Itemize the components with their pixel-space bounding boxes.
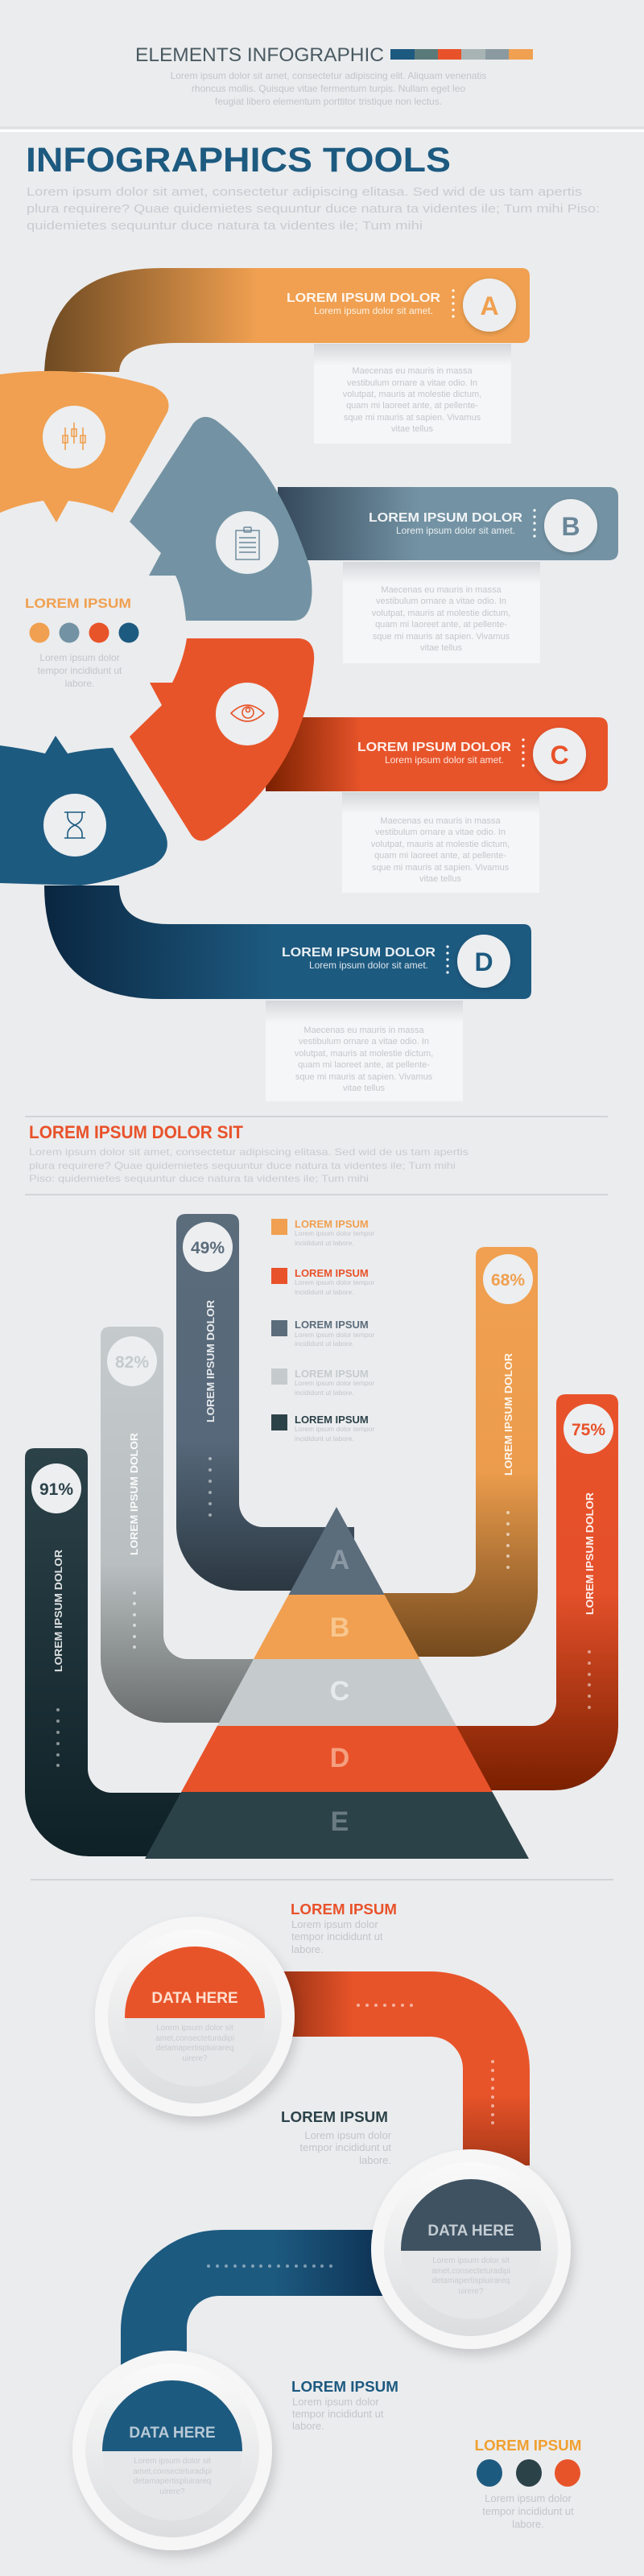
- header subtitle: rhoncus mollis. Quisque vitae fermentum turpis. Nullam eget leo: [192, 83, 465, 94]
- circle 2: data here slate: DATA HERE: [427, 2223, 514, 2240]
- text box D: sque mi mauris at sapien. Vivamus: [295, 1072, 433, 1082]
- bar 49%: [176, 1214, 354, 1591]
- circle 2: data here slate: detamapertispluirareq: [432, 2277, 510, 2285]
- legend: Lorem ipsum dolor tempor: [295, 1331, 374, 1339]
- circle 1: data here orange: Lorem ipsum dolor sit: [156, 2024, 233, 2033]
- banner D: [44, 886, 531, 999]
- banner A: A: [480, 291, 499, 320]
- text box B: Maecenas eu mauris in massa: [381, 585, 502, 595]
- center legend: [25, 596, 138, 689]
- bar 82%: 82%: [115, 1353, 149, 1372]
- text box B: volutpat, mauris at molestie dictum,: [372, 609, 510, 618]
- bar 75%: 75%: [572, 1421, 605, 1439]
- bar 91%: LOREM IPSUM DOLOR: [52, 1549, 64, 1672]
- text box A: vitae tellus: [391, 424, 433, 434]
- text box D: vitae tellus: [343, 1084, 385, 1093]
- banner A: Lorem ipsum dolor sit amet.: [314, 305, 433, 316]
- banner D: Lorem ipsum dolor sit amet.: [309, 960, 428, 971]
- legend: Lorem ipsum dolor tempor: [295, 1425, 374, 1433]
- segment: orange: [0, 371, 169, 522]
- text box C: volutpat, mauris at molestie dictum,: [371, 840, 510, 849]
- callout: dark lorem ipsum: LOREM IPSUM: [281, 2109, 388, 2125]
- pyramid: E: [331, 1806, 349, 1837]
- circle 1: data here orange: [95, 1917, 295, 2116]
- center legend: Lorem ipsum dolor: [39, 652, 120, 663]
- circle 3: data here blue: DATA HERE: [129, 2425, 216, 2442]
- header subtitle: Lorem ipsum dolor sit amet, consectetur adipiscing elit. Aliquam venenatis: [171, 70, 486, 81]
- legend: bottom right: labore.: [512, 2518, 544, 2530]
- icon: sliders: [63, 423, 85, 450]
- circle 3: data here blue: amet,consecteturadipi: [133, 2467, 212, 2476]
- pyramid: C: [330, 1676, 349, 1707]
- banner C: LOREM IPSUM DOLOR: [357, 741, 511, 754]
- legend: incididunt ut labore.: [295, 1288, 354, 1296]
- pyramid: [145, 1507, 529, 1859]
- header subtitle: feugiat libero elementum porttitor tristique non lectus.: [215, 96, 442, 107]
- circle 2: data here slate: [371, 2149, 571, 2349]
- text box B: vitae tellus: [420, 643, 462, 653]
- section 2 paragraph: plura requirere? Quae quidemietes sequuntur duce natura ta videntes ile; Tum mihi: [29, 1160, 456, 1171]
- banner D: D: [474, 947, 493, 976]
- intro paragraph: quidemietes sequuntur duce natura ta videntes ile; Tum mihi: [27, 219, 423, 233]
- legend: bottom right: LOREM IPSUM: [475, 2438, 581, 2454]
- circle 1: data here orange: uirere?: [182, 2054, 208, 2063]
- text box B: [343, 562, 540, 663]
- text box B: sque mi mauris at sapien. Vivamus: [373, 632, 510, 642]
- text box A: sque mi mauris at sapien. Vivamus: [344, 413, 481, 423]
- header: elements infographic: [135, 44, 533, 66]
- circle 3: data here blue: Lorem ipsum dolor sit: [134, 2457, 211, 2466]
- section 2 paragraph: Piso: quidemietes sequuntur duce natura ta videntes ile; Tum mihi: [29, 1173, 369, 1184]
- bar 49%: LOREM IPSUM DOLOR: [204, 1299, 217, 1422]
- callout: dark lorem ipsum: tempor incididunt ut: [300, 2141, 391, 2153]
- bar 91%: [25, 1448, 209, 1856]
- header: elements infographic: ELEMENTS INFOGRAPHIC: [135, 44, 384, 66]
- circle 3: data here blue: uirere?: [159, 2487, 185, 2496]
- banner B: Lorem ipsum dolor sit amet.: [396, 525, 515, 536]
- text box D: vestibulum ornare a vitae odio. In: [299, 1037, 429, 1046]
- center legend: LOREM IPSUM: [25, 596, 131, 611]
- legend: bottom right: [475, 2438, 581, 2530]
- text box C: vitae tellus: [419, 874, 461, 884]
- banner A: [44, 268, 530, 372]
- banner B: LOREM IPSUM DOLOR: [369, 511, 522, 525]
- text box A: vestibulum ornare a vitae odio. In: [347, 378, 477, 388]
- panel: wheel section: [0, 268, 618, 1101]
- color swatch bar: [390, 49, 533, 60]
- text box D: [266, 1001, 463, 1101]
- banner C: [266, 717, 608, 791]
- blue path: [121, 2230, 402, 2383]
- banner D: LOREM IPSUM DOLOR: [282, 946, 436, 960]
- callout: orange lorem ipsum: tempor incididunt ut: [291, 1930, 383, 1942]
- callout: dark lorem ipsum: Lorem ipsum dolor: [304, 2129, 392, 2141]
- banner C: C: [550, 741, 569, 770]
- legend: Lorem ipsum dolor tempor: [295, 1229, 374, 1237]
- intro paragraph: plura requirere? Quae quidemietes sequuntur duce natura ta videntes ile; Tum mihi Piso:: [27, 202, 600, 216]
- intro paragraph: Lorem ipsum dolor sit amet, consectetur adipiscing elitasa. Sed wid de us tam apertis: [27, 185, 582, 199]
- text box B: vestibulum ornare a vitae odio. In: [376, 597, 506, 606]
- pyramid: D: [330, 1743, 349, 1773]
- panel: pyramid chart: [25, 1214, 618, 1859]
- title: infographics tools: INFOGRAPHICS TOOLS: [26, 141, 451, 180]
- circle 2: data here slate: amet,consecteturadipi: [431, 2267, 510, 2276]
- center legend: labore.: [65, 678, 94, 689]
- callout: dark lorem ipsum: labore.: [359, 2154, 391, 2166]
- icon: eye: [231, 705, 264, 721]
- circle 2: data here slate: Lorem ipsum dolor sit: [432, 2256, 510, 2265]
- text box C: quam mi laoreet ante, at pellente-: [374, 851, 506, 861]
- text box D: quam mi laoreet ante, at pellente-: [298, 1060, 430, 1070]
- text box A: [314, 344, 511, 444]
- banner B: B: [561, 512, 580, 541]
- bar 68%: 68%: [491, 1271, 525, 1290]
- callout: orange lorem ipsum: labore.: [291, 1943, 324, 1955]
- text box A: volutpat, mauris at molestie dictum,: [343, 390, 481, 399]
- circle 3: data here blue: detamapertispluirareq: [134, 2477, 211, 2486]
- callout: blue lorem ipsum: tempor incididunt ut: [292, 2408, 384, 2420]
- heading: lorem ipsum dolor sit: LOREM IPSUM DOLOR SIT: [29, 1122, 244, 1142]
- callout: blue lorem ipsum: labore.: [292, 2420, 324, 2432]
- circle 1: data here orange: detamapertispluirareq: [156, 2044, 233, 2053]
- legend: LOREM IPSUM: [295, 1218, 369, 1230]
- text box C: [342, 792, 539, 893]
- legend: LOREM IPSUM: [295, 1368, 369, 1380]
- bar 82%: LOREM IPSUM DOLOR: [128, 1432, 140, 1555]
- circle 1: data here orange: amet,consecteturadipi: [155, 2034, 234, 2043]
- legend: incididunt ut labore.: [295, 1435, 354, 1443]
- legend: LOREM IPSUM: [295, 1319, 369, 1331]
- bar 75%: LOREM IPSUM DOLOR: [584, 1492, 596, 1615]
- callout: blue lorem ipsum: LOREM IPSUM: [291, 2379, 398, 2395]
- callout: blue lorem ipsum: [291, 2379, 398, 2432]
- text box A: Maecenas eu mauris in massa: [352, 366, 473, 376]
- legend: bottom right: tempor incididunt ut: [482, 2505, 574, 2517]
- center legend: tempor incididunt ut: [38, 665, 122, 676]
- legend: LOREM IPSUM: [295, 1267, 369, 1279]
- pyramid: A: [330, 1545, 349, 1575]
- legend: Lorem ipsum dolor tempor: [295, 1379, 374, 1387]
- panel: timeline path: [72, 1917, 571, 2550]
- circle 3: data here blue: [72, 2351, 272, 2550]
- segment: gray: [130, 417, 312, 621]
- section 2 paragraph: Lorem ipsum dolor sit amet, consectetur adipiscing elitasa. Sed wid de us tam apertis: [29, 1146, 469, 1158]
- legend: [271, 1218, 374, 1443]
- legend: incididunt ut labore.: [295, 1239, 354, 1247]
- bar 82%: [101, 1327, 274, 1723]
- legend: incididunt ut labore.: [295, 1340, 354, 1348]
- banner A: LOREM IPSUM DOLOR: [287, 291, 440, 305]
- icon: hourglass: [64, 812, 85, 838]
- bar 91%: 91%: [39, 1480, 73, 1499]
- callout: orange lorem ipsum: [291, 1901, 397, 1955]
- banner C: Lorem ipsum dolor sit amet.: [385, 754, 504, 766]
- callout: blue lorem ipsum: Lorem ipsum dolor: [292, 2396, 379, 2408]
- legend: incididunt ut labore.: [295, 1389, 354, 1397]
- circle 2: data here slate: uirere?: [458, 2287, 484, 2296]
- text box D: volutpat, mauris at molestie dictum,: [295, 1049, 433, 1059]
- circle 1: data here orange: DATA HERE: [151, 1990, 238, 2007]
- bar 68%: LOREM IPSUM DOLOR: [502, 1352, 514, 1476]
- banner B: [278, 487, 618, 560]
- text box A: quam mi laoreet ante, at pellente-: [346, 401, 478, 411]
- legend: bottom right: Lorem ipsum dolor: [485, 2492, 572, 2504]
- segment: blue: [0, 736, 167, 886]
- text box C: Maecenas eu mauris in massa: [380, 816, 501, 826]
- pyramid: B: [330, 1612, 349, 1643]
- callout: orange lorem ipsum: LOREM IPSUM: [291, 1901, 397, 1918]
- intro paragraph: [27, 185, 600, 233]
- orange path: [242, 1971, 530, 2165]
- text box C: sque mi mauris at sapien. Vivamus: [372, 863, 510, 873]
- callout: dark lorem ipsum: [281, 2109, 392, 2166]
- icon: clipboard: [236, 527, 259, 559]
- section 2 paragraph: [29, 1146, 469, 1184]
- bar 75%: [443, 1394, 618, 1790]
- text box C: vestibulum ornare a vitae odio. In: [375, 828, 506, 837]
- bar 68%: [362, 1247, 538, 1657]
- bar 49%: 49%: [191, 1239, 225, 1257]
- legend: Lorem ipsum dolor tempor: [295, 1278, 374, 1286]
- segment: red: [130, 638, 314, 841]
- callout: orange lorem ipsum: Lorem ipsum dolor: [291, 1918, 378, 1930]
- text box B: quam mi laoreet ante, at pellente-: [375, 620, 507, 630]
- header subtitle: [171, 70, 486, 107]
- text box D: Maecenas eu mauris in massa: [303, 1026, 424, 1035]
- legend: LOREM IPSUM: [295, 1414, 369, 1426]
